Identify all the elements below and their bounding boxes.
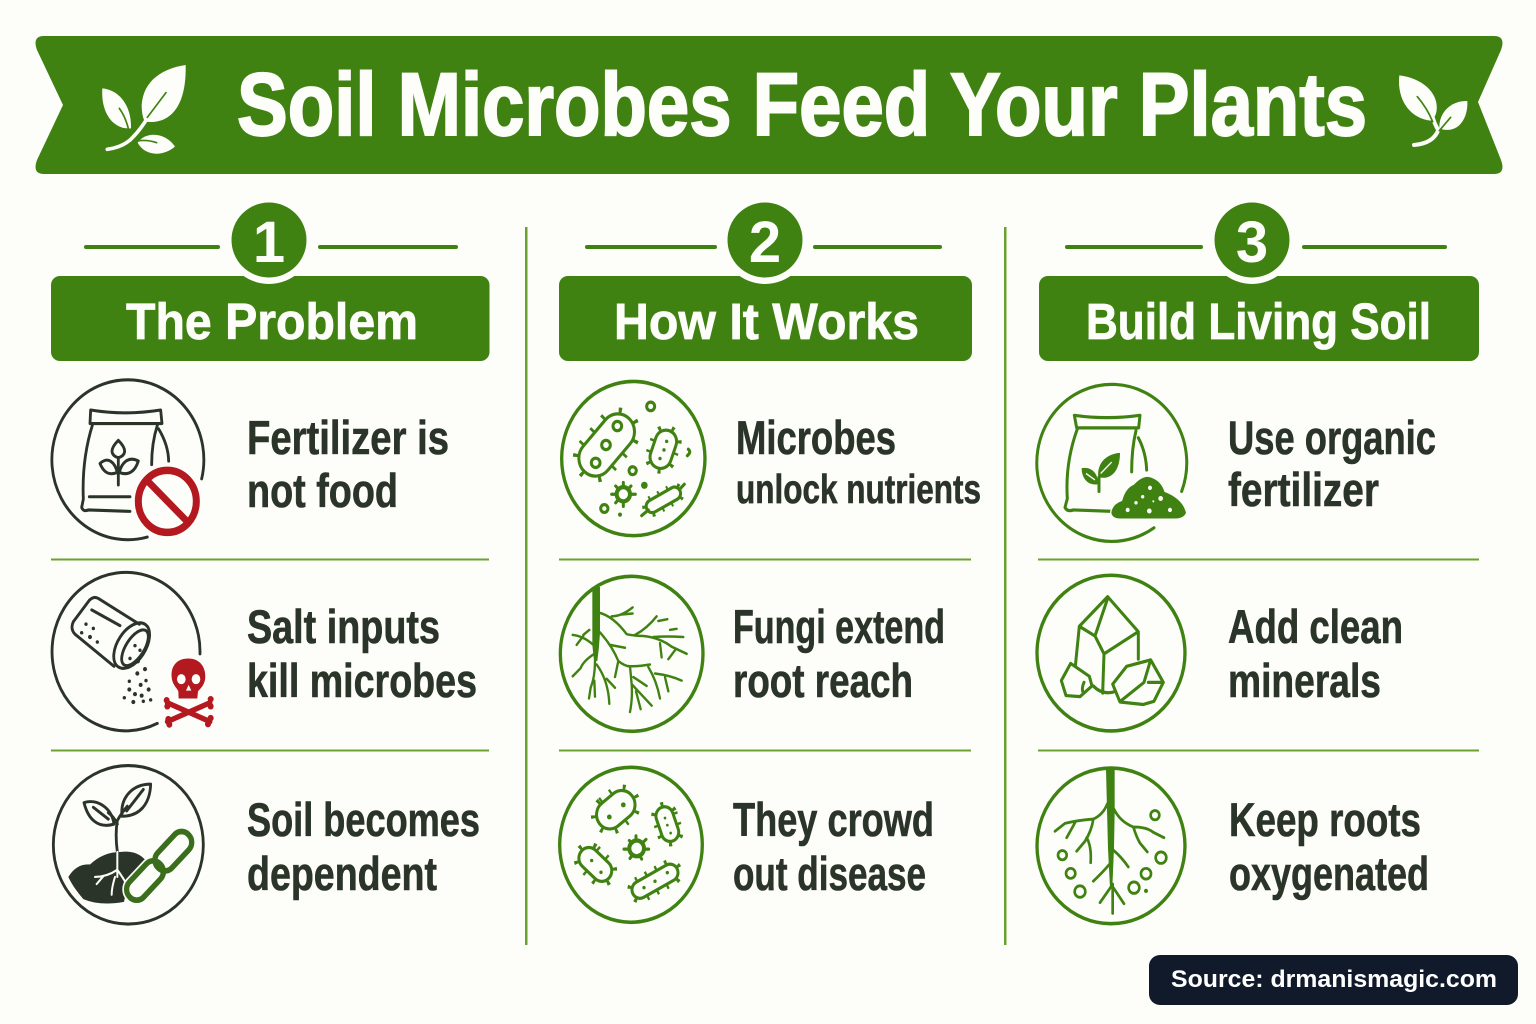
text: Fertilizer is not food <box>247 411 449 517</box>
number badge 1: 1 <box>253 210 285 275</box>
title banner <box>36 36 1502 174</box>
section heading: The Problem: The Problem <box>126 293 418 350</box>
text: Fungi extend root reach <box>733 600 945 707</box>
text: Salt inputs kill microbes <box>247 600 477 707</box>
row dividers <box>1038 560 1479 750</box>
number badge 2 <box>559 196 972 361</box>
text: Soil becomes dependent: dependent <box>247 847 437 900</box>
column divider lines <box>525 227 1006 945</box>
text: Add clean minerals: minerals <box>1228 654 1381 707</box>
text: Keep roots oxygenated: oxygenated <box>1229 847 1429 900</box>
icon: microbes <box>562 381 705 536</box>
number badge 3 <box>1039 196 1479 361</box>
text: Use organic fertilizer: Use organic <box>1228 411 1436 464</box>
row dividers <box>51 560 489 750</box>
icon: microbes crowding out disease <box>560 767 702 922</box>
text: Soil becomes dependent <box>247 793 480 900</box>
text: Use organic fertilizer <box>1228 411 1436 516</box>
text: Use organic fertilizer: fertilizer <box>1228 463 1379 516</box>
icon: organic fertilizer bag <box>1037 384 1187 541</box>
text: Fungi extend root reach: Fungi extend <box>733 600 945 653</box>
text: They crowd out disease <box>733 793 934 900</box>
text: They crowd out disease: They crowd <box>733 793 934 846</box>
text: Soil becomes dependent: Soil becomes <box>247 793 480 846</box>
row dividers <box>559 560 971 750</box>
icon: seedling in soil with chain <box>53 766 203 924</box>
icon: left leaves <box>102 65 186 154</box>
icon: oxygenated roots <box>1037 768 1185 924</box>
text: Salt inputs kill microbes: Salt inputs <box>247 600 440 653</box>
icon: right leaves <box>1399 75 1467 145</box>
number badge 2: 2 <box>749 210 781 275</box>
number badge 3: 3 <box>1236 210 1268 275</box>
text: Microbes unlock nutrients: Microbes <box>736 411 896 464</box>
text: Add clean minerals: Add clean <box>1228 600 1403 653</box>
panel: how it works <box>559 196 981 922</box>
panel: build living soil <box>1037 196 1479 924</box>
text: Fertilizer is not food: not food <box>247 464 398 517</box>
icon: clean mineral crystals <box>1037 575 1185 731</box>
text: Keep roots oxygenated: Keep roots <box>1229 793 1421 846</box>
panel: the problem <box>51 196 490 924</box>
text: Fungi extend root reach: root reach <box>733 654 913 707</box>
source badge <box>1149 955 1518 1005</box>
text: Keep roots oxygenated <box>1229 793 1429 900</box>
source badge: Source: drmanismagic.com <box>1171 966 1497 993</box>
section heading: Build Living Soil: Build Living Soil <box>1086 293 1431 350</box>
text: Salt inputs kill microbes: kill microbes <box>247 654 477 707</box>
section heading: How It Works: How It Works <box>614 293 919 350</box>
text: Add clean minerals <box>1228 600 1403 707</box>
text: They crowd out disease: out disease <box>733 847 926 900</box>
text: Microbes unlock nutrients: unlock nutrients <box>736 466 981 512</box>
icon: fungi hyphae on root <box>560 576 703 731</box>
text: Microbes unlock nutrients <box>736 411 981 512</box>
number badge 1 <box>51 196 490 361</box>
icon: salt shaker with skull <box>52 572 214 731</box>
icon: fertilizer bag with prohibition sign <box>52 380 204 540</box>
text: Fertilizer is not food: Fertilizer is <box>247 411 449 464</box>
heading text: Soil Microbes Feed Your Plants <box>237 54 1367 154</box>
